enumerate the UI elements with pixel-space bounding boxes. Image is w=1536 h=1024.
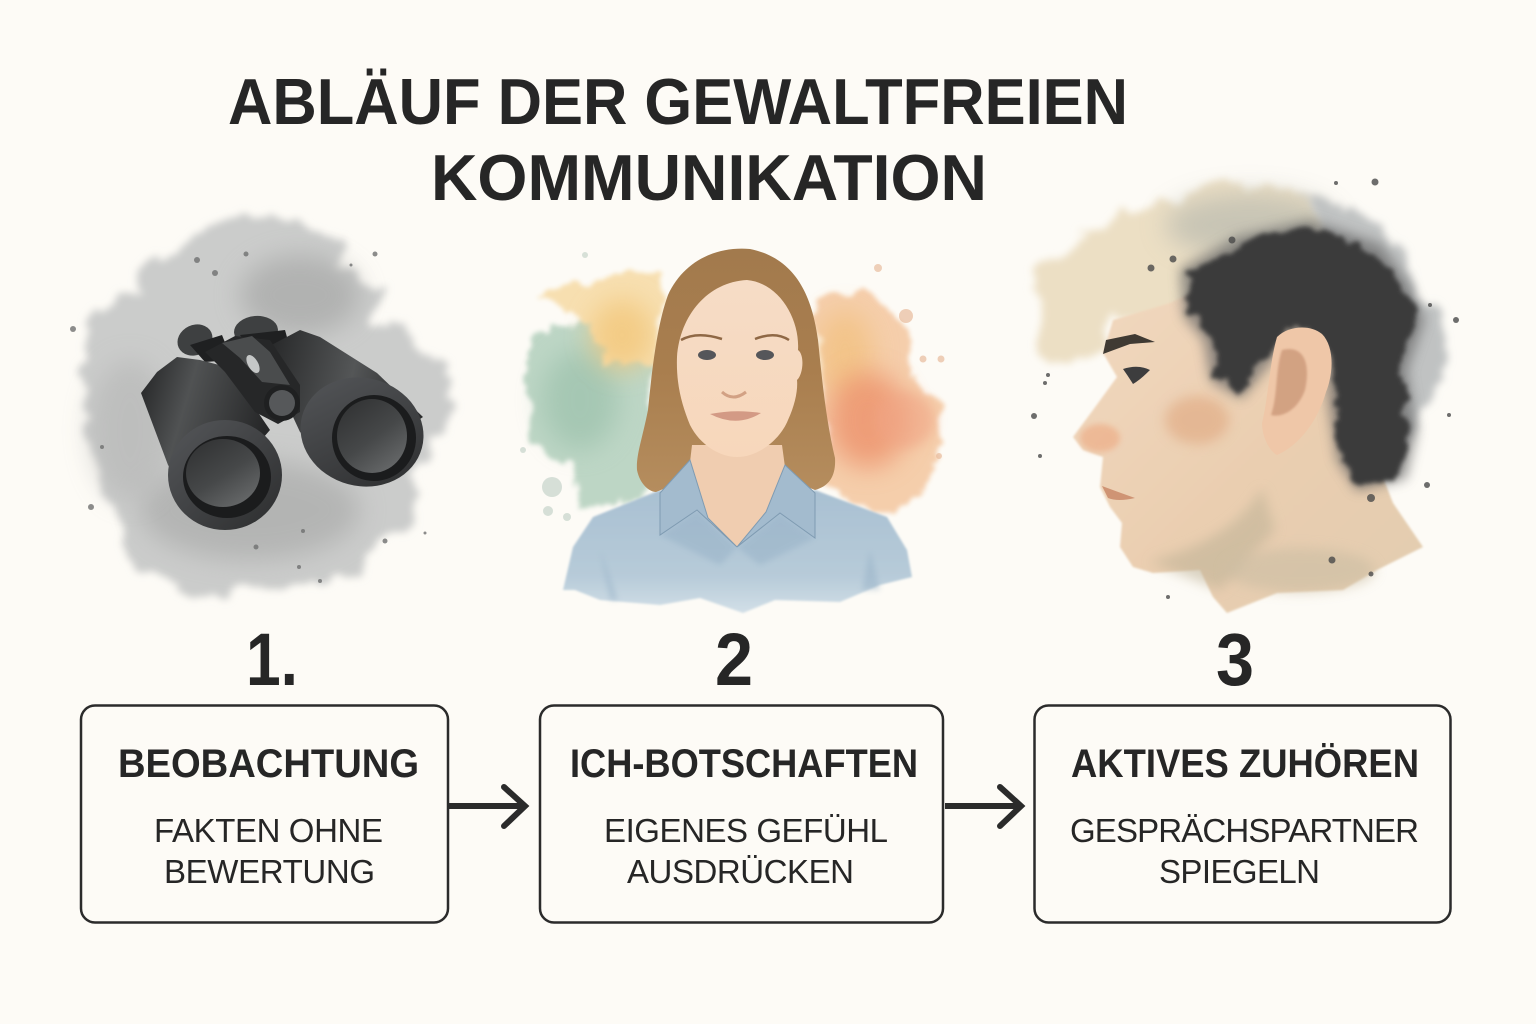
- jaw shadow: [1150, 488, 1275, 590]
- neck shading: [1225, 548, 1375, 592]
- dark hair: [1187, 227, 1417, 483]
- description: Gesprächspartner spiegeln: [1070, 812, 1419, 890]
- left barrel: [141, 357, 270, 510]
- bridge and focus wheel: [205, 336, 300, 424]
- cheek blush: [1165, 396, 1229, 444]
- grey upper wash: [1165, 193, 1335, 257]
- nose tint: [1080, 424, 1120, 452]
- description: Gesprächspartner spiegeln: GESPRÄCHSPARTNER: [1070, 812, 1419, 849]
- grey watercolor wash: [70, 205, 453, 597]
- heading: Ich-Botschaften: ICH-BOTSCHAFTEN: [570, 742, 918, 786]
- beige watercolor wash: [1033, 183, 1330, 363]
- panel: Ich-Botschaften: [540, 706, 943, 922]
- shirt: [563, 490, 912, 613]
- panel: Beobachtung: [81, 706, 448, 922]
- icon: man profile on earth and black watercolor: [1031, 178, 1459, 613]
- step number 1: 1.: [246, 618, 298, 701]
- description: Fakten ohne Bewertung: FAKTEN OHNE: [154, 812, 383, 849]
- step number 3: 3: [1216, 618, 1254, 701]
- hair: [637, 249, 835, 492]
- step number 2: 2: [715, 618, 753, 701]
- shirt folds: [600, 510, 880, 600]
- heading: Beobachtung: BEOBACHTUNG: [118, 742, 419, 786]
- title: KOMMUNIKATION: [431, 141, 987, 214]
- description: Eigenes Gefühl ausdrücken: EIGENES GEFÜHL: [604, 812, 888, 849]
- hair halo: [1187, 227, 1417, 483]
- eye and brow: [1103, 334, 1155, 384]
- icon: woman portrait on colorful watercolor: [520, 249, 945, 613]
- description: Fakten ohne Bewertung: [154, 812, 383, 890]
- eyepieces: [172, 314, 290, 362]
- right objective lens: [288, 364, 436, 500]
- description: Eigenes Gefühl ausdrücken: [604, 812, 888, 890]
- title: [228, 65, 1128, 214]
- spatter: [1031, 178, 1459, 599]
- grey right wash: [1300, 190, 1443, 470]
- left objective lens: [168, 420, 282, 530]
- description: Eigenes Gefühl ausdrücken: AUSDRÜCKEN: [627, 853, 854, 890]
- title: ABLÄUF DER GEWALTFREIEN: [228, 65, 1128, 138]
- lips: [1102, 486, 1135, 500]
- description: Fakten ohne Bewertung: BEWERTUNG: [164, 853, 375, 890]
- face and neck: [1073, 270, 1423, 613]
- neck: [690, 445, 785, 547]
- arrow: step 1 to step 2: [449, 787, 525, 826]
- ear: [1262, 328, 1332, 455]
- panel: Aktives Zuhören: [1034, 706, 1450, 922]
- right barrel: [262, 330, 423, 470]
- colorful watercolor wash: [520, 252, 945, 521]
- face: [677, 280, 802, 457]
- arrow: step 2 to step 3: [945, 787, 1021, 826]
- facial features: [681, 335, 789, 421]
- heading: Aktives Zuhören: AKTIVES ZUHÖREN: [1071, 741, 1419, 786]
- collar: [660, 460, 815, 547]
- icon: binoculars on grey watercolor: [70, 205, 453, 597]
- description: Gesprächspartner spiegeln: SPIEGELN: [1159, 853, 1320, 890]
